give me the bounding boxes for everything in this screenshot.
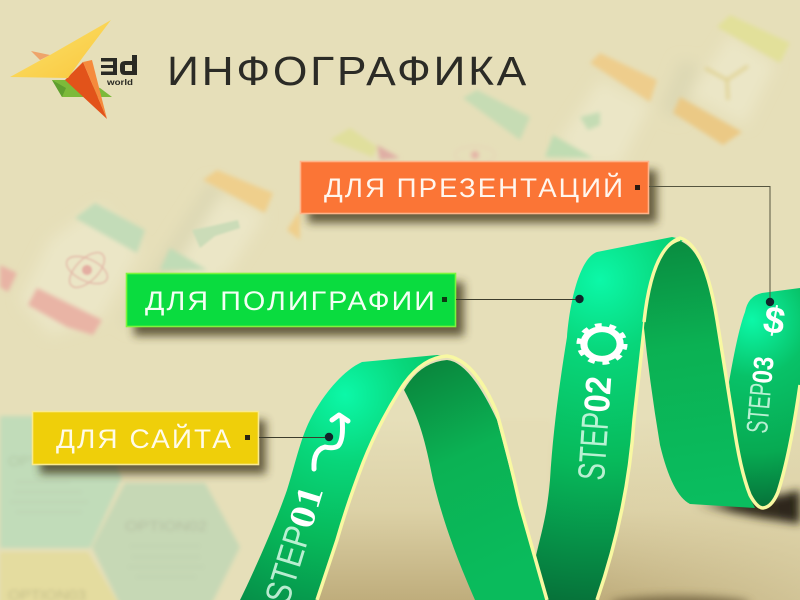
title: ИНФОГРАФИКА bbox=[167, 48, 529, 94]
ribbon: front band 1 bbox=[240, 355, 447, 600]
ribbon: back band 1 bbox=[404, 360, 547, 600]
ribbon: front band 2 bbox=[528, 237, 685, 600]
callout: для полиграфии: ДЛЯ ПОЛИГРАФИИ bbox=[145, 286, 437, 316]
flask icon bbox=[192, 220, 240, 248]
callout: для презентаций: ДЛЯ ПРЕЗЕНТАЦИЙ bbox=[324, 172, 625, 203]
callout: для сайта: ДЛЯ САЙТА bbox=[56, 423, 233, 454]
ribbon: band 3 front bbox=[729, 288, 800, 507]
step 01 label: 01 bbox=[280, 481, 331, 533]
ribbon: yellow edge band 2 and 3 bbox=[644, 238, 800, 508]
connector: step 03 bbox=[649, 186, 774, 306]
ribbon floor shadow bbox=[300, 420, 800, 600]
step 03 label: STEP bbox=[741, 382, 778, 435]
blurred DNA strips bbox=[0, 15, 790, 335]
ribbon: yellow edge band 2 front bbox=[597, 240, 680, 600]
connector: step 02 bbox=[456, 295, 584, 303]
step 02 label: 02 bbox=[576, 375, 619, 414]
step 02 label: STEP bbox=[571, 411, 618, 482]
blurred hexagons: OPTION02 bbox=[125, 518, 207, 535]
logo wordmark: world bbox=[106, 78, 133, 87]
connector: step 01 bbox=[259, 433, 333, 441]
blurred hexagons bbox=[0, 416, 240, 600]
step 03 label: 03 bbox=[746, 355, 780, 385]
blurred DNA cells bbox=[20, 35, 775, 335]
callout: для сайта bbox=[32, 412, 266, 474]
callout: для полиграфии bbox=[126, 274, 464, 336]
atom icon bbox=[62, 247, 112, 293]
logo bbox=[10, 20, 137, 119]
ribbon: back band 2 bbox=[644, 241, 755, 508]
callout: для презентаций bbox=[300, 162, 657, 223]
blurred hexagons: OPTION bbox=[8, 453, 66, 470]
icon: gear bbox=[579, 326, 625, 362]
icon: squiggly arrow bbox=[314, 415, 348, 469]
icon: dollar: $ bbox=[760, 299, 788, 344]
logo mark bbox=[10, 20, 112, 119]
ribbon: yellow edge band 1 bbox=[317, 356, 547, 600]
